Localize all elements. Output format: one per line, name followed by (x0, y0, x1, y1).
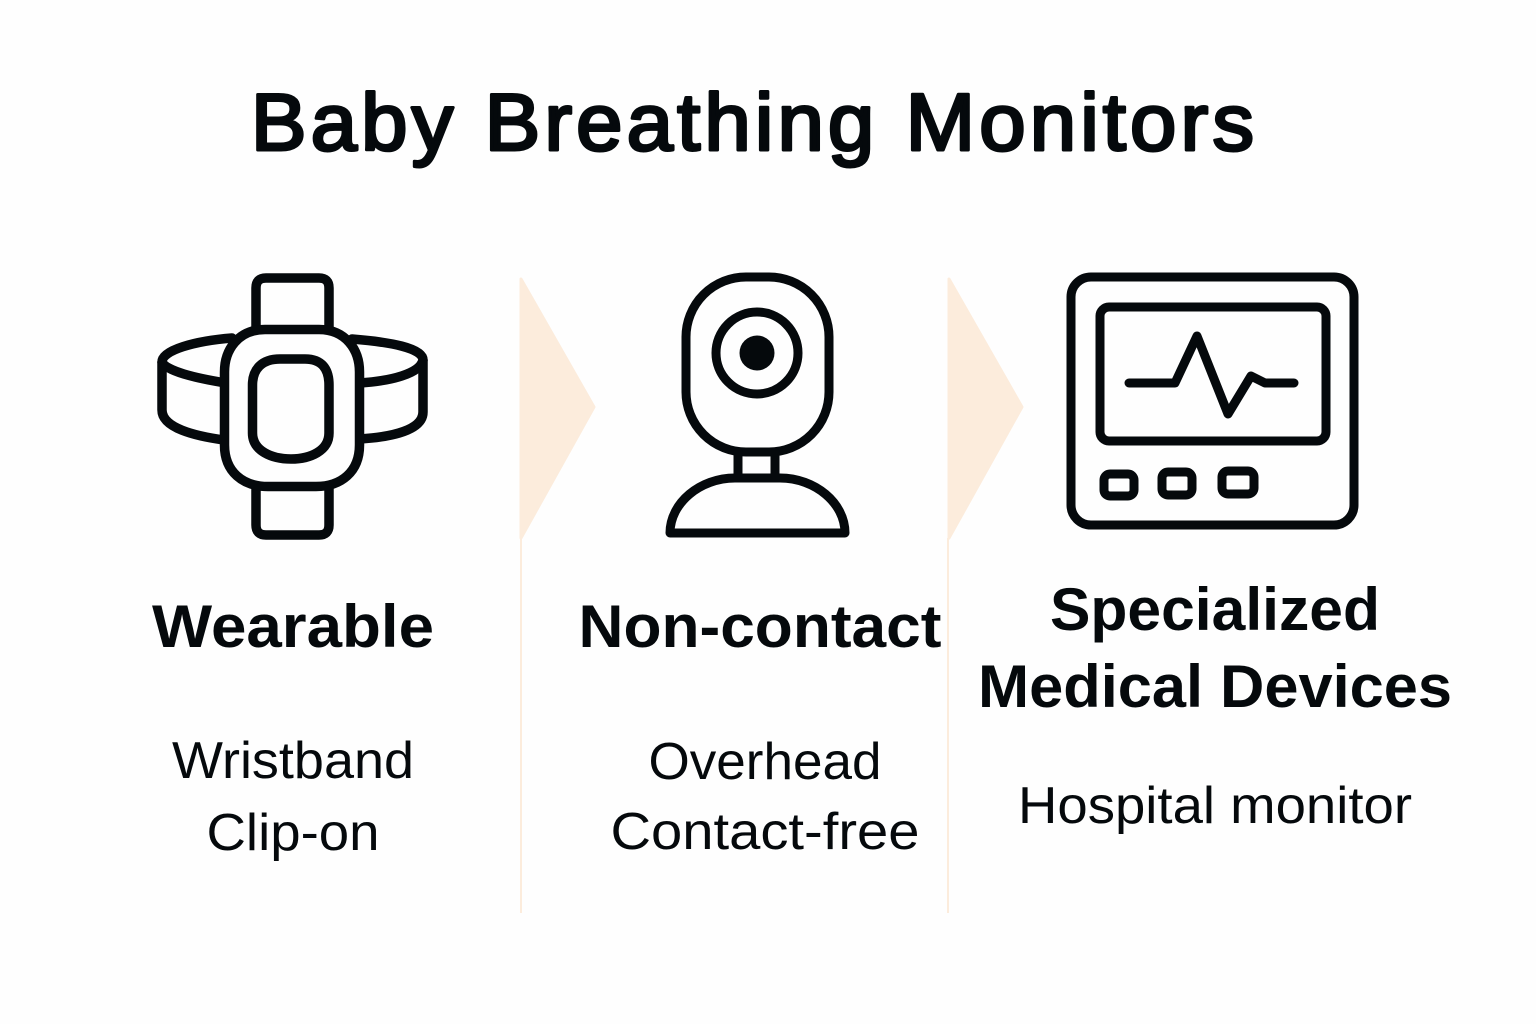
text: non-contact examples: Contact-free (610, 803, 920, 861)
text: wearable examples (172, 732, 414, 862)
heading: non-contact: Non-contact (578, 593, 942, 660)
text: non-contact examples (610, 733, 920, 861)
heading: specialized medical devices (978, 576, 1452, 720)
text: wearable examples: Wristband (172, 732, 414, 790)
text: specialized example: Hospital monitor (1018, 777, 1412, 835)
heading: specialized medical devices: Specialized (1050, 576, 1380, 643)
icon: wristband (162, 278, 423, 535)
heading: wearable: Wearable (152, 593, 434, 660)
text: non-contact examples: Overhead (648, 733, 882, 791)
heading: specialized medical devices: Medical Devices (978, 653, 1452, 720)
title: Baby Breathing Monitors (251, 78, 1254, 168)
icon: camera (670, 277, 845, 533)
panel: wearable (152, 278, 434, 862)
arrow: first chevron divider (520, 279, 594, 913)
icon: hospital monitor (1071, 277, 1354, 525)
text: wearable examples: Clip-on (206, 804, 380, 862)
panel: non-contact (578, 277, 942, 861)
panel: specialized medical devices (978, 277, 1452, 835)
arrow: second chevron divider (947, 279, 1022, 913)
